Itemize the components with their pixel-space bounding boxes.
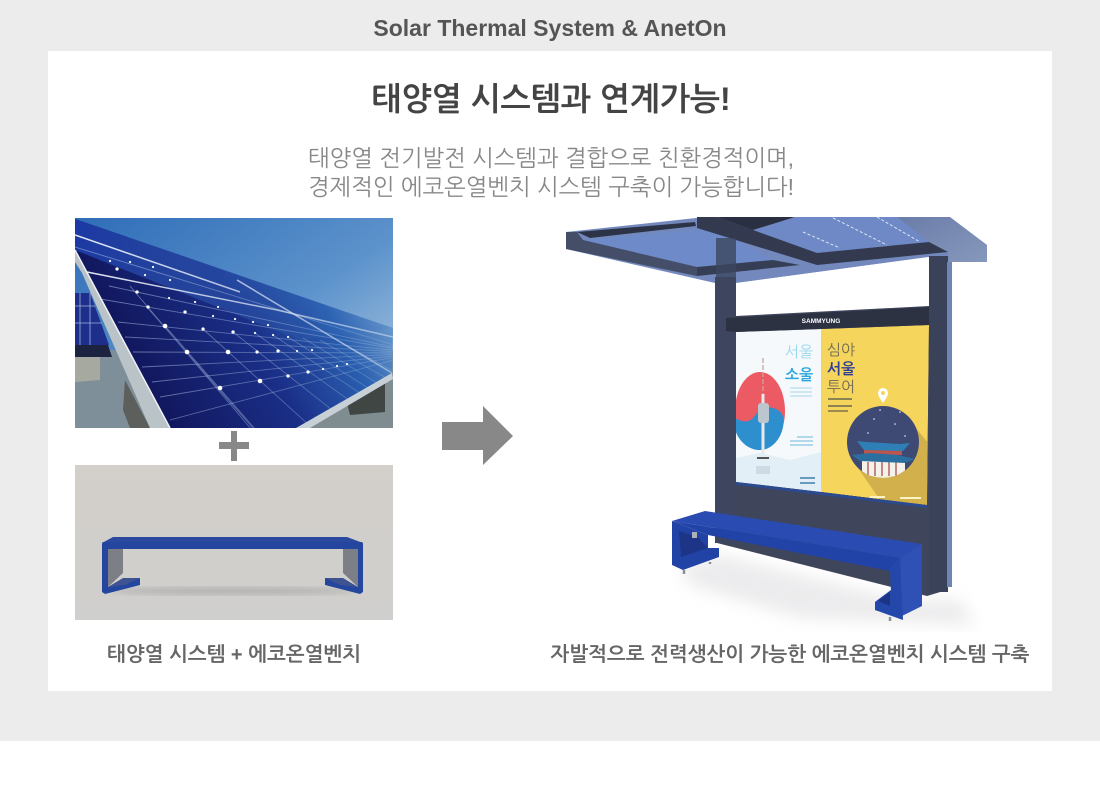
arrow	[442, 406, 513, 465]
night circle	[847, 406, 919, 478]
description text: 태양열 전기발전 시스템과 결합으로 친환경적이며,	[308, 145, 794, 171]
clear opening above board	[736, 257, 929, 316]
glass panel: left	[583, 228, 773, 267]
poster: right	[821, 325, 930, 508]
bench feet	[684, 562, 890, 621]
plus icon	[219, 431, 249, 461]
cell junction dots	[165, 326, 260, 388]
support	[123, 380, 150, 428]
long shadow	[858, 429, 928, 505]
caption: left: 태양열 시스템 + 에코온열벤치	[107, 644, 361, 666]
description text: 경제적인 에코온열벤치 시스템 구축이 가능합니다!	[308, 174, 794, 200]
header bar	[726, 307, 929, 332]
poster heading: 서울	[785, 344, 813, 361]
poster bottom edge	[736, 482, 927, 508]
photo: solar panels	[75, 218, 393, 428]
post through glass	[716, 238, 736, 278]
top title: Solar Thermal System & AnetOn	[373, 15, 727, 41]
white content panel	[48, 51, 1052, 691]
bench right leg	[875, 544, 922, 617]
bench legs inner	[108, 548, 123, 587]
bench front	[672, 521, 900, 573]
panel surface	[75, 219, 393, 428]
tower	[762, 358, 764, 394]
ground	[75, 350, 393, 428]
glass panel: right	[753, 217, 929, 253]
poster heading: 심야	[827, 342, 856, 359]
roof frame right beam	[697, 217, 948, 265]
back panel	[716, 300, 947, 596]
caption: right: 자발적으로 전력생산이 가능한 에코온열벤치 시스템 구축	[550, 644, 1029, 666]
roof underside	[566, 218, 987, 283]
roof edge right	[897, 217, 987, 262]
ground shadow	[680, 555, 975, 625]
distant panel	[75, 293, 109, 345]
illustration: bus shelter	[566, 217, 987, 625]
bench left leg	[102, 544, 140, 594]
brand name: SAMMYUNG	[802, 318, 840, 325]
poster: left	[734, 329, 821, 492]
post left	[715, 277, 736, 543]
taegeuk circle	[735, 372, 785, 450]
description text	[308, 145, 794, 200]
bench shadow	[110, 587, 354, 595]
panel cell grid	[75, 234, 393, 428]
bench seat top	[672, 511, 922, 558]
bench right leg	[325, 544, 363, 594]
poster: right: 서울	[827, 361, 855, 378]
post right	[929, 256, 948, 592]
photo: bench	[75, 465, 393, 620]
bench left leg	[672, 521, 719, 570]
map pin	[878, 388, 888, 403]
watercolor skyline	[736, 452, 821, 492]
poster: right: 투어	[827, 379, 855, 396]
poster: left: 소울	[785, 367, 813, 384]
roof cross beam	[697, 260, 800, 276]
stars	[868, 410, 905, 436]
palace	[852, 441, 914, 478]
heading: 태양열 시스템과 연계가능!	[371, 81, 731, 117]
aluminium frame	[75, 250, 170, 428]
bench top	[102, 537, 363, 543]
roof frame left beam	[566, 232, 697, 276]
